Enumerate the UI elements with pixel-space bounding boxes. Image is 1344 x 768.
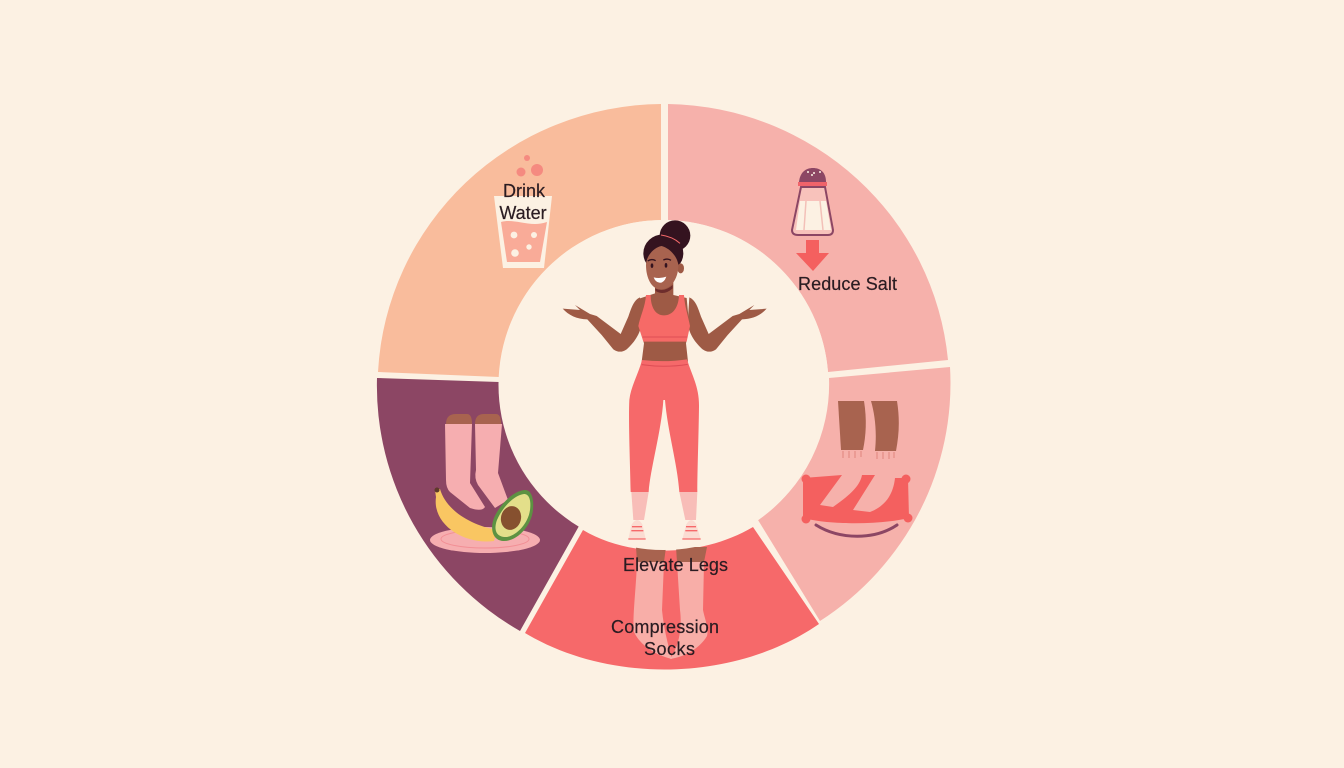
leggings <box>629 359 699 492</box>
neck and torso skin <box>639 282 689 362</box>
face <box>646 246 678 289</box>
centre circle <box>498 220 828 550</box>
icon: legs resting on pillow <box>802 401 912 536</box>
label: compression socks <box>611 617 719 659</box>
shoes <box>628 520 646 539</box>
right arm <box>688 297 767 352</box>
ear <box>677 263 684 273</box>
label: elevate legs: Elevate Legs <box>623 555 728 575</box>
panel: drink water segment <box>378 104 661 377</box>
panel: elevate legs segment <box>758 367 950 621</box>
icon: compression socks <box>633 547 708 659</box>
icon: salt shaker <box>792 168 833 235</box>
neck shadow <box>655 285 673 293</box>
label: reduce salt: Reduce Salt <box>798 274 897 294</box>
hair tie <box>661 235 680 243</box>
label: compression socks: Compression <box>611 617 719 637</box>
hair bun <box>660 220 690 251</box>
circular wheel of remedies <box>377 104 950 669</box>
label: drink water: Drink <box>503 181 546 201</box>
left arm <box>563 297 642 352</box>
figure: smiling woman in coral sportswear <box>563 220 767 539</box>
panel: compression socks segment <box>525 527 819 669</box>
panel: potassium foods segment <box>377 378 579 631</box>
sports top <box>638 295 690 342</box>
panel: reduce salt segment <box>668 104 948 372</box>
icon: compression socks and food <box>430 414 540 553</box>
label: drink water <box>499 181 547 223</box>
hair <box>643 234 683 272</box>
smile <box>654 277 666 283</box>
icon: water glass with bubbles <box>494 155 552 268</box>
shoe details <box>628 527 701 539</box>
icon: down arrow <box>796 240 829 271</box>
label: drink water: Water <box>499 203 547 223</box>
label: compression socks: Socks <box>644 639 695 659</box>
socks <box>631 492 649 520</box>
eyes and brows <box>648 259 671 261</box>
